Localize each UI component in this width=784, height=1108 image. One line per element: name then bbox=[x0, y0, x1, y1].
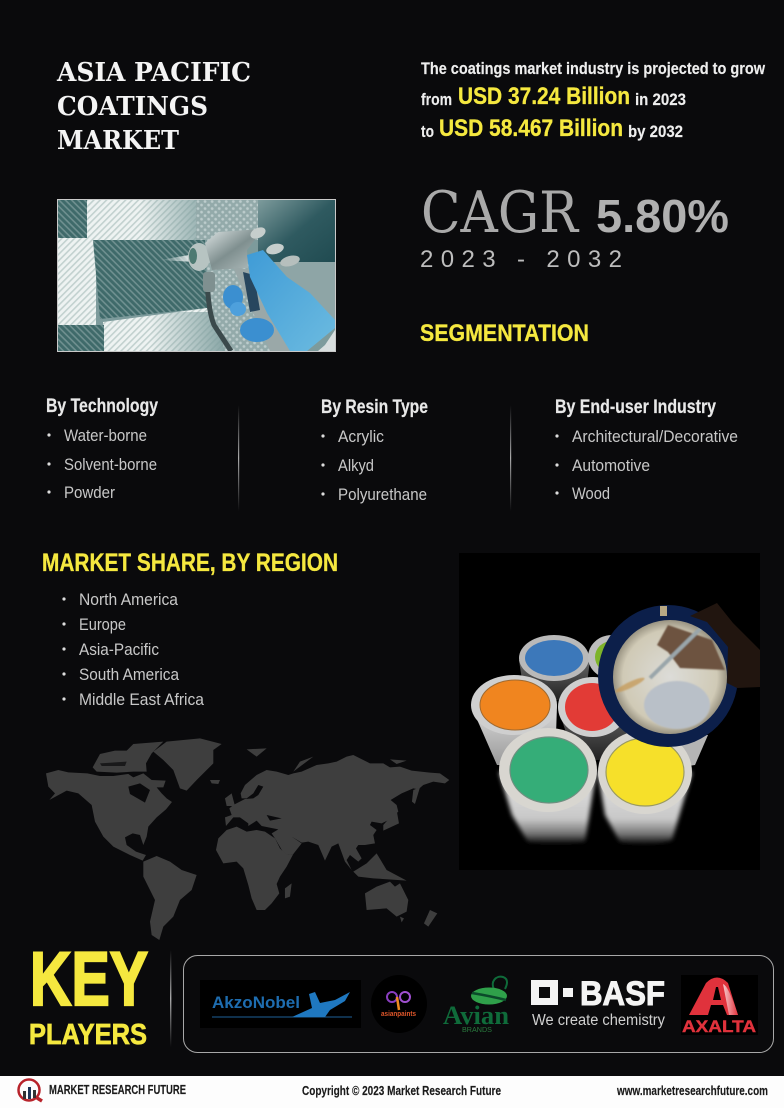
can: yellow bbox=[598, 730, 692, 845]
logo: Axalta: AXALTA bbox=[682, 1017, 756, 1036]
logo: AkzoNobel bbox=[200, 980, 361, 1028]
region list bbox=[62, 590, 204, 709]
region list: Asia-Pacific bbox=[79, 640, 159, 659]
logo: Avian Brands: BRANDS bbox=[462, 1027, 492, 1034]
panel: by technology: Solvent-borne bbox=[64, 455, 157, 474]
CAGR figure bbox=[420, 180, 729, 273]
CAGR figure: 2023 - 2032 bbox=[420, 246, 622, 273]
panel: by end-user industry: By End-user Industry bbox=[555, 397, 716, 418]
logo: Axalta bbox=[681, 975, 758, 1036]
footer: Copyright © 2023 Market Research Future bbox=[302, 1084, 501, 1098]
heading: segmentation: SEGMENTATION bbox=[420, 320, 589, 347]
panel: by technology bbox=[46, 396, 158, 502]
logo: BASF: BASF bbox=[580, 975, 665, 1013]
logo: Asian Paints: asianpaints bbox=[381, 1009, 416, 1018]
panel: by end-user industry bbox=[555, 397, 738, 503]
projection text block: by 2032 bbox=[628, 122, 683, 141]
logo: Asian Paints bbox=[371, 975, 427, 1033]
can: green bbox=[499, 728, 597, 844]
panel: by technology: By Technology bbox=[46, 396, 158, 417]
panel: by end-user industry: Automotive bbox=[572, 456, 650, 475]
projection text block: USD 58.467 Billion bbox=[439, 115, 623, 142]
panel: by resin type: Acrylic bbox=[338, 427, 384, 446]
spray gun body bbox=[188, 225, 301, 351]
CAGR figure: CAGR bbox=[421, 180, 580, 246]
heading: key players bbox=[29, 937, 148, 1051]
photo: spray gun bbox=[57, 199, 336, 352]
title: COATINGS bbox=[57, 92, 208, 122]
title bbox=[56, 58, 251, 156]
panel: by end-user industry: Wood bbox=[572, 484, 610, 503]
logo: BASF: We create chemistry bbox=[532, 1012, 665, 1029]
projection text block: USD 37.24 Billion bbox=[458, 83, 630, 110]
icon: market research future bbox=[18, 1080, 42, 1101]
footer bbox=[0, 1076, 784, 1108]
CAGR figure: 5.80% bbox=[596, 190, 729, 242]
logo: Avian Brands: Avian bbox=[443, 1001, 510, 1030]
projection text block: in 2023 bbox=[635, 90, 686, 109]
heading: key players: KEY bbox=[30, 937, 148, 1022]
panel: by resin type: Alkyd bbox=[338, 456, 374, 475]
logo: BASF bbox=[531, 975, 665, 1029]
region list: North America bbox=[79, 590, 179, 609]
world map bbox=[46, 738, 449, 940]
can: orange bbox=[471, 675, 557, 765]
projection text block: to bbox=[421, 122, 434, 141]
hand bbox=[690, 603, 760, 688]
panel: key player logos bbox=[184, 956, 774, 1052]
glove bbox=[223, 250, 335, 351]
title: MARKET bbox=[57, 126, 180, 156]
panel: by resin type: Polyurethane bbox=[338, 485, 427, 504]
heading: key players: PLAYERS bbox=[29, 1019, 147, 1051]
spray mist bbox=[162, 255, 189, 262]
magnifying glass bbox=[598, 605, 738, 747]
panel: by resin type: By Resin Type bbox=[321, 397, 428, 418]
logo: Avian Brands bbox=[443, 977, 510, 1034]
heading: market share by region: MARKET SHARE, BY REGION bbox=[42, 549, 338, 577]
region list: Middle East Africa bbox=[79, 690, 204, 709]
title: ASIA PACIFIC bbox=[56, 58, 251, 88]
panel: by resin type bbox=[321, 397, 428, 504]
footer: MARKET RESEARCH FUTURE bbox=[49, 1083, 186, 1097]
photo: paint cans bbox=[459, 553, 760, 870]
logo: AkzoNobel: AkzoNobel bbox=[212, 993, 300, 1012]
can: red bbox=[558, 677, 630, 760]
projection text block: from bbox=[421, 90, 452, 109]
panel: by end-user industry: Architectural/Decorative bbox=[572, 427, 738, 446]
panel: by technology: Powder bbox=[64, 483, 115, 502]
can: lime bbox=[588, 635, 636, 679]
can: rear right body bbox=[655, 735, 708, 770]
region list: South America bbox=[79, 665, 179, 684]
panel: by technology: Water-borne bbox=[64, 426, 147, 445]
can: blue bbox=[519, 635, 590, 700]
projection text block bbox=[421, 59, 766, 142]
region list: Europe bbox=[79, 615, 126, 634]
